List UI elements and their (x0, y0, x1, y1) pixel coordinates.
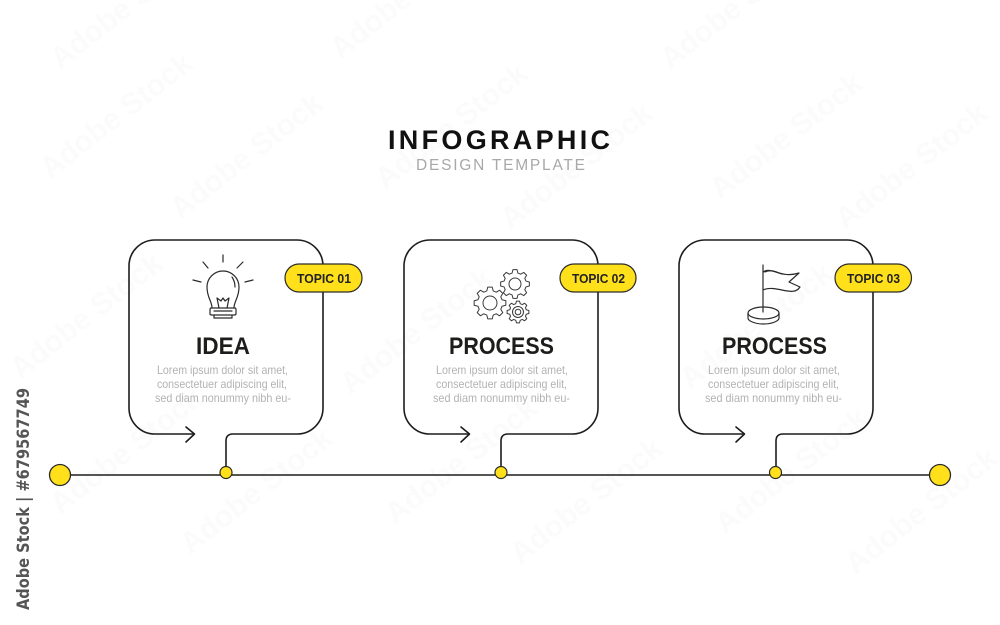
heading: PROCESS (722, 333, 827, 360)
badge: topic 03 (835, 264, 912, 292)
text: Adobe Stock (829, 96, 994, 236)
text: Adobe Stock (379, 391, 544, 531)
body text (705, 363, 842, 405)
body text: Lorem ipsum dolor sit amet, (157, 363, 288, 377)
body text: consectetuer adipiscing elit, (436, 377, 567, 391)
body text: Lorem ipsum dolor sit amet, (708, 363, 840, 377)
panel: process 1 (404, 240, 636, 478)
text: Adobe Stock (164, 86, 329, 226)
icon: flag (748, 265, 800, 324)
badge: topic 03: TOPIC 03 (847, 271, 900, 286)
card outline with arrow (129, 240, 323, 467)
text: Adobe Stock (4, 246, 169, 386)
panel: process 2 (679, 240, 912, 478)
body text (155, 363, 291, 405)
text: Adobe Stock (674, 256, 839, 396)
body text: sed diam nonummy nibh eu- (155, 391, 291, 405)
text: Adobe Stock (174, 421, 339, 561)
badge: topic 02 (560, 264, 636, 292)
text: Adobe Stock (704, 66, 869, 206)
heading: IDEA (196, 333, 250, 360)
timeline end node (930, 464, 950, 486)
timeline marker 2 (495, 466, 507, 478)
timeline (50, 464, 950, 486)
body text: sed diam nonummy nibh eu- (705, 391, 842, 405)
body text: consectetuer adipiscing elit, (708, 377, 839, 391)
timeline marker 1 (220, 466, 232, 478)
text: Adobe Stock (504, 431, 669, 571)
text: Adobe Stock (709, 401, 874, 541)
heading: PROCESS (449, 333, 554, 360)
badge: topic 01: TOPIC 01 (297, 271, 351, 286)
icon: light bulb (193, 255, 253, 318)
text: Adobe Stock (34, 46, 199, 186)
subtitle: DESIGN TEMPLATE (416, 157, 585, 174)
card outline with arrow (679, 240, 873, 467)
timeline start node (50, 464, 70, 486)
badge: topic 01 (285, 264, 362, 292)
text: Adobe Stock (334, 261, 499, 401)
text: Adobe Stock (494, 96, 659, 236)
body text (433, 363, 570, 405)
body text: Lorem ipsum dolor sit amet, (436, 363, 568, 377)
stock credit: Adobe Stock | #679567749 (14, 388, 34, 610)
timeline marker 3 (770, 466, 782, 478)
body text: consectetuer adipiscing elit, (157, 377, 287, 391)
text: Adobe Stock (369, 56, 534, 196)
text: Adobe Stock (44, 381, 209, 521)
badge: topic 02: TOPIC 02 (572, 271, 625, 286)
body text: sed diam nonummy nibh eu- (433, 391, 570, 405)
title: INFOGRAPHIC (388, 125, 610, 155)
panel: idea (129, 240, 362, 478)
text: Adobe Stock (839, 441, 1000, 581)
card outline with arrow (404, 240, 598, 467)
icon: gears (474, 270, 529, 323)
